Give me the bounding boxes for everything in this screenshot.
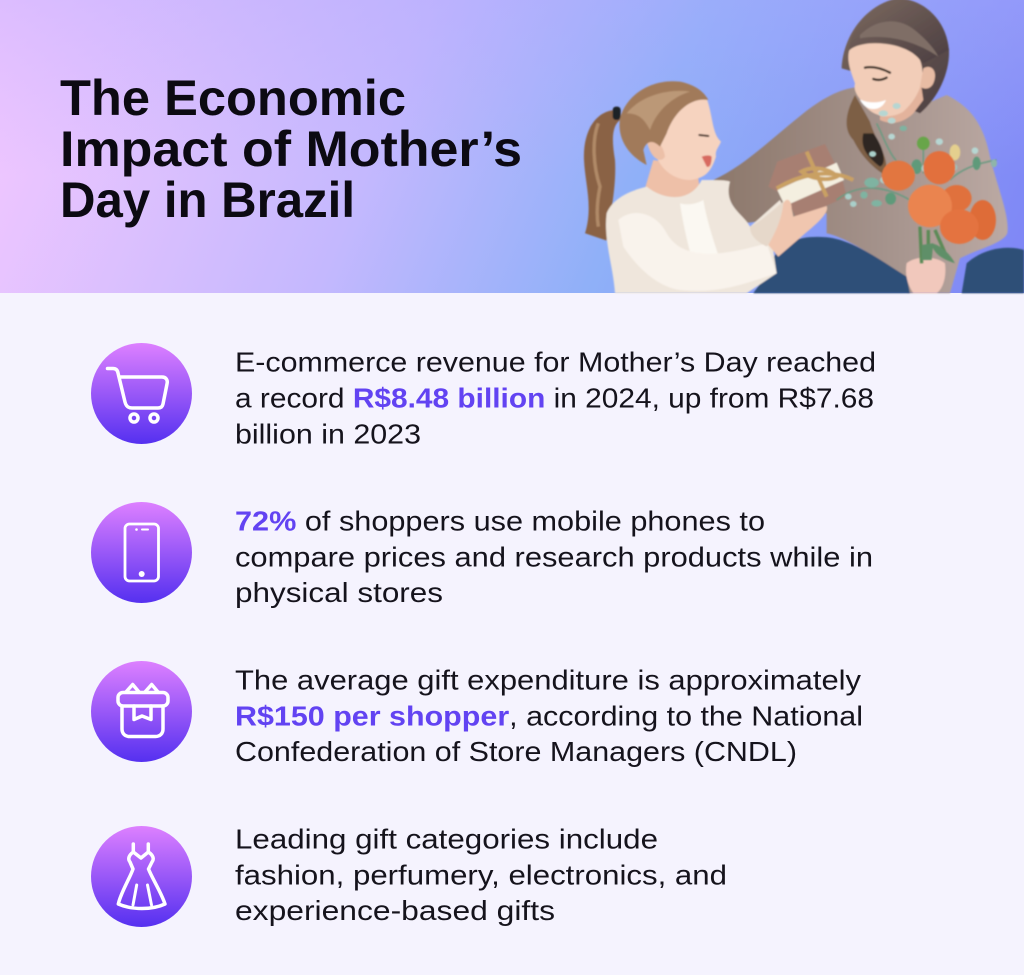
- girl's face: [653, 97, 721, 180]
- text: mobile phones: [235, 506, 873, 608]
- text: e-commerce revenue: a record R$8.48 billion in 2024, up from R$7.68: [235, 382, 874, 414]
- mother's jeans: [753, 237, 910, 293]
- icon: dress: [91, 826, 192, 927]
- text: e-commerce revenue: E-commerce revenue for Mother’s Day reached: [235, 346, 876, 378]
- text: gift categories: Leading gift categories include: [235, 823, 658, 854]
- title: Day in Brazil: [60, 172, 355, 228]
- text: gift categories: experience-based gifts: [235, 895, 555, 926]
- header banner: [0, 0, 1024, 293]
- text: gift categories: [235, 823, 727, 926]
- text: e-commerce revenue: [235, 346, 876, 449]
- title: Impact of Mother’s: [60, 121, 522, 177]
- girl's neck: [645, 160, 700, 200]
- text: mobile phones: compare prices and research products while in: [235, 541, 873, 572]
- text: gift categories: fashion, perfumery, electronics, and: [235, 859, 727, 890]
- mother's sweater: [713, 87, 1008, 293]
- mother's neck and face: [880, 77, 923, 123]
- title: [60, 70, 522, 228]
- icon: shopping cart: [91, 343, 192, 444]
- text: gift expenditure: [235, 664, 863, 767]
- girl's ponytail: [584, 110, 620, 241]
- mother's wavy hair strands: [847, 95, 887, 175]
- mother's top hair: [848, 0, 949, 63]
- text: mobile phones: physical stores: [235, 577, 443, 608]
- text: e-commerce revenue: billion in 2023: [235, 418, 421, 449]
- list item 4: gift categories: [91, 823, 727, 927]
- text: gift expenditure: Confederation of Store Managers (CNDL): [235, 736, 797, 767]
- text: mobile phones: 72% of shoppers use mobile phones to: [235, 506, 765, 537]
- mother's eyes and smile: [865, 67, 890, 80]
- photo: mother and daughter exchanging gift and flowers: [584, 0, 1024, 293]
- icon: gift box: [91, 661, 192, 762]
- girl's hand: [768, 200, 827, 257]
- mother's hand: [906, 258, 945, 293]
- list item 2: mobile phones: [91, 502, 873, 608]
- text: gift expenditure: The average gift expenditure is approximately: [235, 664, 861, 695]
- title: The Economic: [60, 70, 406, 126]
- girl's hair: [619, 81, 708, 165]
- gift box: [768, 144, 847, 219]
- flower bouquet: [837, 103, 997, 263]
- text: gift expenditure: R$150 per shopper , according to the National: [235, 700, 863, 731]
- list item 3: gift expenditure: [91, 661, 863, 767]
- list item 1: e-commerce revenue: [91, 343, 876, 449]
- girl's blouse: [606, 180, 784, 293]
- mother's back hair: [842, 0, 949, 113]
- icon: mobile phone: [91, 502, 192, 603]
